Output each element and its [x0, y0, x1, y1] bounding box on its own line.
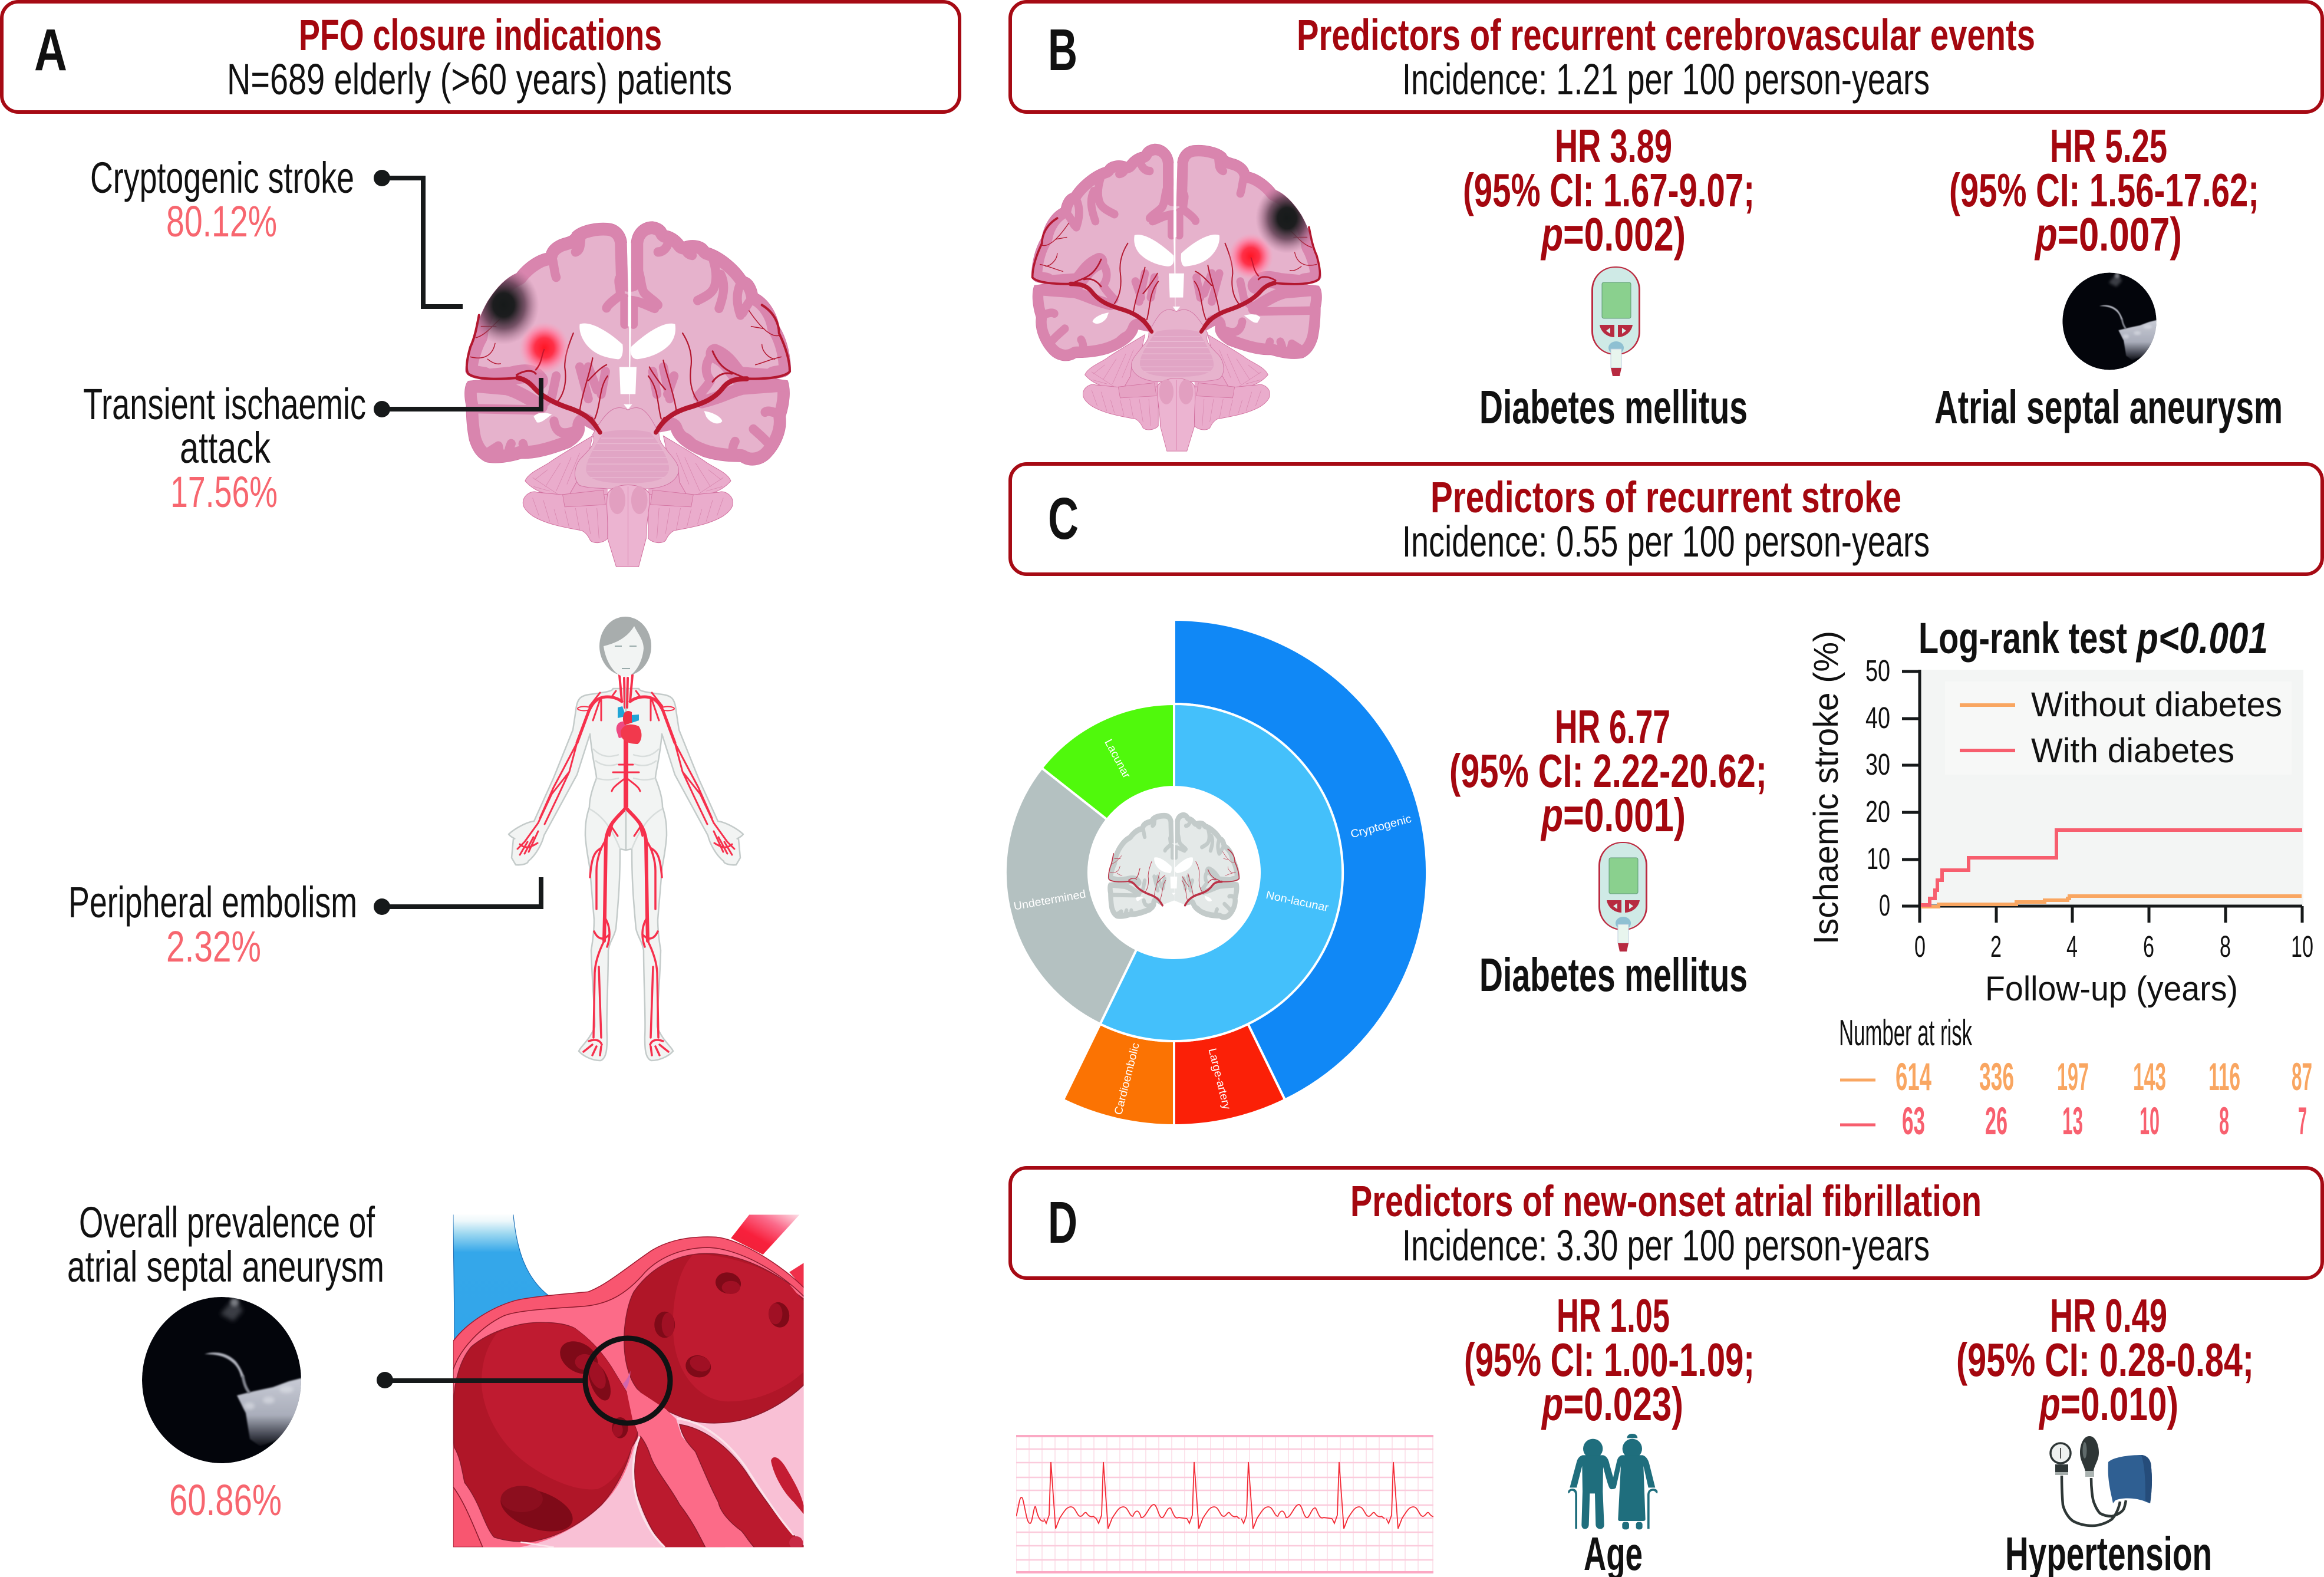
header box B: B: [1048, 17, 1077, 83]
Kaplan-Meier chart: 4: [2066, 930, 2078, 963]
Kaplan-Meier chart: 20: [1865, 795, 1890, 828]
hypertension hazard ratio: [1956, 1289, 2254, 1577]
sunburst segment labels: Cryptogenic: [1349, 813, 1413, 841]
header box A: N=689 elderly (>60 years) patients: [227, 55, 732, 104]
Kaplan-Meier chart: 0: [1879, 888, 1890, 922]
number at risk table: 26: [1985, 1099, 2007, 1143]
Kaplan-Meier chart: 8: [2220, 930, 2231, 963]
sunburst segment labels: Non-lacunar: [1265, 889, 1330, 914]
age hazard ratio: (95% CI: 1.00-1.09;: [1464, 1334, 1755, 1386]
sunburst segment labels: Undetermined: [1013, 888, 1087, 913]
diabetes mellitus hazard ratio: p=0.001): [1540, 789, 1686, 841]
atrial septal aneurysm prevalence: 60.86%: [169, 1476, 282, 1525]
header box B: Predictors of recurrent cerebrovascular events: [1297, 11, 2035, 60]
diabetes mellitus hazard ratio: Diabetes mellitus: [1479, 949, 1748, 1001]
peripheral embolism callout: [68, 877, 541, 971]
peripheral embolism callout: 2.32%: [166, 922, 261, 971]
header box C: Predictors of recurrent stroke: [1430, 473, 1901, 522]
icon: echocardiogram image: [2062, 273, 2157, 370]
Kaplan-Meier chart: 6: [2143, 930, 2154, 963]
sunburst segment labels: Cardioembolic: [1112, 1042, 1142, 1116]
brain illustration, mirrored: [1031, 144, 1321, 451]
Kaplan-Meier chart: p<0.001: [2135, 614, 2268, 663]
number at risk table: 336: [1979, 1055, 2014, 1098]
number at risk table: 614: [1896, 1055, 1931, 1098]
header box A: PFO closure indications: [299, 11, 662, 60]
icon: blood pressure cuff: [2051, 1436, 2152, 1526]
Kaplan-Meier chart: Log-rank test: [1918, 614, 2127, 663]
Kaplan-Meier chart: 2: [1990, 930, 2002, 963]
header box A: A: [34, 17, 67, 83]
diabetes mellitus hazard ratio: HR 3.89: [1555, 120, 1672, 172]
header box C: Incidence: 0.55 per 100 person-years: [1402, 517, 1930, 566]
sunburst segment labels: Large-artery: [1206, 1047, 1233, 1111]
atrial septal aneurysm hazard ratio: HR 5.25: [2050, 120, 2167, 172]
diabetes mellitus hazard ratio: [1463, 120, 1755, 433]
number at risk table: 143: [2133, 1055, 2166, 1098]
header box D: Incidence: 3.30 per 100 person-years: [1402, 1221, 1930, 1270]
number at risk table: Number at risk: [1839, 1013, 1973, 1053]
header box C: C: [1048, 486, 1079, 552]
sunburst segment labels: Lacunar: [1102, 738, 1133, 781]
number at risk table: 8: [2219, 1099, 2229, 1143]
number at risk table: 10: [2140, 1099, 2160, 1143]
panel D: predictors of new-onset atrial fibrillation: [1010, 1168, 2322, 1577]
Kaplan-Meier chart: 30: [1865, 748, 1890, 781]
transient ischaemic attack callout: attack: [180, 423, 271, 472]
age hazard ratio: p=0.023): [1541, 1378, 1683, 1430]
panel C: predictors of recurrent stroke: [1006, 464, 2322, 1143]
atrial septal aneurysm prevalence: Overall prevalence of: [79, 1198, 375, 1247]
electrocardiogram strip: [1016, 1436, 1439, 1573]
diabetes mellitus hazard ratio: p=0.002): [1540, 208, 1686, 261]
number at risk table: [1839, 1013, 2312, 1143]
number at risk table: 197: [2057, 1055, 2089, 1098]
atrial septal aneurysm hazard ratio: [1934, 120, 2283, 433]
hypertension hazard ratio: p=0.010): [2039, 1378, 2178, 1430]
leader line and circle to atrial septum: [377, 1338, 670, 1423]
Kaplan-Meier chart: 40: [1865, 701, 1890, 735]
header box C: [1010, 464, 2322, 574]
Kaplan-Meier chart: 10: [1867, 842, 1890, 875]
diabetes mellitus hazard ratio: (95% CI: 1.67-9.07;: [1463, 164, 1755, 216]
age hazard ratio: [1464, 1289, 1755, 1577]
Kaplan-Meier chart: Without diabetes: [2031, 686, 2282, 724]
icon: glucose meter: [1591, 266, 1640, 376]
Kaplan-Meier chart: 10: [2291, 930, 2313, 963]
header box D: Predictors of new-onset atrial fibrillation: [1350, 1177, 1982, 1226]
number at risk table: 7: [2298, 1099, 2307, 1143]
peripheral embolism callout: Peripheral embolism: [68, 878, 357, 927]
cryptogenic stroke callout: Cryptogenic stroke: [90, 153, 354, 202]
icon: echocardiogram image: [142, 1297, 303, 1463]
icon: glucose meter: [1598, 842, 1647, 952]
body with arterial system illustration: [509, 617, 743, 1061]
number at risk table: 13: [2062, 1099, 2083, 1143]
hypertension hazard ratio: HR 0.49: [2050, 1289, 2167, 1342]
transient ischaemic attack callout: 17.56%: [170, 467, 278, 516]
Kaplan-Meier chart: 0: [1914, 930, 1926, 963]
header box A: [2, 2, 960, 112]
age hazard ratio: HR 1.05: [1557, 1289, 1670, 1342]
sunburst chart of stroke subtypes: [1006, 620, 1427, 1125]
header box D: D: [1048, 1190, 1077, 1256]
icon: elderly couple: [1568, 1434, 1657, 1529]
transient ischaemic attack callout: Transient ischaemic: [83, 380, 366, 429]
atrial septal aneurysm prevalence: [67, 1198, 384, 1525]
Kaplan-Meier chart: Ischaemic stroke (%): [1807, 631, 1845, 944]
diabetes mellitus hazard ratio: Diabetes mellitus: [1479, 381, 1748, 433]
atrial septal aneurysm hazard ratio: p=0.007): [2034, 208, 2182, 261]
brain illustration with ischaemic lesions: [465, 222, 791, 567]
panel A: PFO closure indications: [2, 2, 960, 1550]
diabetes mellitus hazard ratio: (95% CI: 2.22-20.62;: [1449, 745, 1767, 797]
transient ischaemic attack callout: [83, 378, 541, 516]
Kaplan-Meier chart: With diabetes: [2031, 732, 2234, 770]
cryptogenic stroke callout: [90, 153, 463, 307]
cryptogenic stroke callout: 80.12%: [166, 197, 277, 246]
number at risk table: 116: [2208, 1055, 2240, 1098]
Kaplan-Meier chart: Follow-up (years): [1985, 970, 2238, 1008]
diabetes mellitus hazard ratio: [1449, 700, 1767, 1001]
diabetes mellitus hazard ratio: HR 6.77: [1555, 700, 1670, 753]
header box D: [1010, 1168, 2322, 1278]
Kaplan-Meier chart: [1807, 614, 2313, 1008]
heart cross-section illustration: [453, 1213, 807, 1550]
small grey brain at sunburst centre: [1107, 812, 1240, 920]
header box B: Incidence: 1.21 per 100 person-years: [1402, 55, 1930, 104]
sunburst segment labels: [1013, 738, 1413, 1116]
number at risk table: 63: [1902, 1099, 1925, 1143]
Kaplan-Meier chart: 50: [1865, 654, 1890, 687]
atrial septal aneurysm prevalence: atrial septal aneurysm: [67, 1242, 384, 1291]
panel B: predictors of recurrent cerebrovascular events: [1010, 2, 2322, 451]
header box B: [1010, 2, 2322, 112]
